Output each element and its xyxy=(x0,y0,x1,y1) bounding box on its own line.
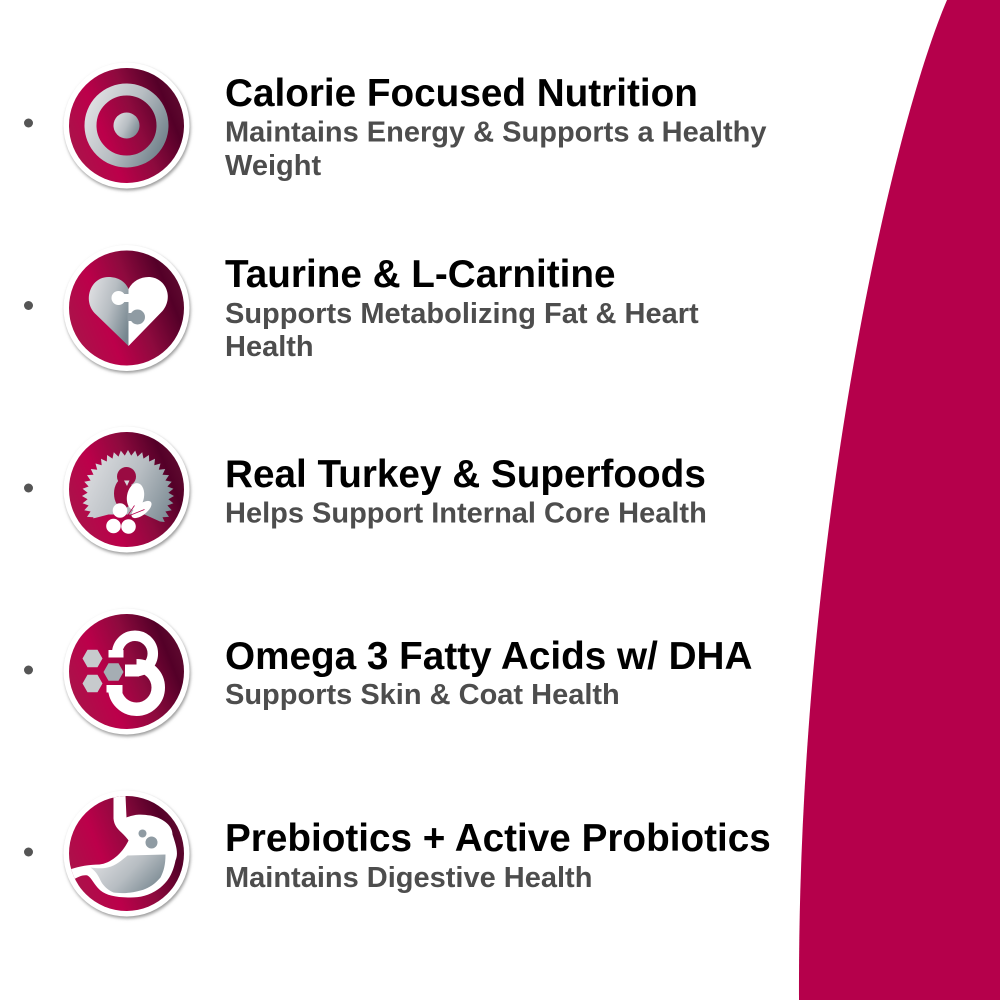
heading: Calorie Focused Nutrition xyxy=(225,72,698,115)
row: Prebiotics + Active Probiotics xyxy=(24,790,771,918)
decorative crimson curved panel xyxy=(799,0,1000,1000)
bullet xyxy=(24,301,33,310)
description: Maintains Digestive Health xyxy=(225,862,592,894)
heading: Omega 3 Fatty Acids w/ DHA xyxy=(225,635,752,678)
heading: Real Turkey & Superfoods xyxy=(225,453,706,496)
icon: puzzle heart xyxy=(64,245,190,373)
icon: turkey and berries xyxy=(64,426,190,554)
row: Real Turkey & Superfoods xyxy=(24,426,707,554)
bullet xyxy=(24,666,33,674)
icon: target xyxy=(64,62,190,190)
heading: Taurine & L-Carnitine xyxy=(225,253,615,296)
bullet xyxy=(24,848,33,856)
row: Calorie Focused Nutrition xyxy=(24,62,766,190)
heading: Prebiotics + Active Probiotics xyxy=(225,817,771,860)
description: Helps Support Internal Core Health xyxy=(225,498,707,530)
icon: omega 3 xyxy=(64,608,190,736)
description: Weight xyxy=(225,150,321,182)
description: Supports Metabolizing Fat & Heart xyxy=(225,298,699,330)
description: Maintains Energy & Supports a Healthy xyxy=(225,116,766,148)
bullet xyxy=(24,118,33,128)
description: Health xyxy=(225,331,314,363)
row: Omega 3 Fatty Acids w/ DHA xyxy=(24,608,752,736)
row: Taurine & L-Carnitine xyxy=(24,245,699,373)
description: Supports Skin & Coat Health xyxy=(225,679,620,711)
icon: stomach xyxy=(64,790,190,918)
bullet xyxy=(24,484,33,492)
